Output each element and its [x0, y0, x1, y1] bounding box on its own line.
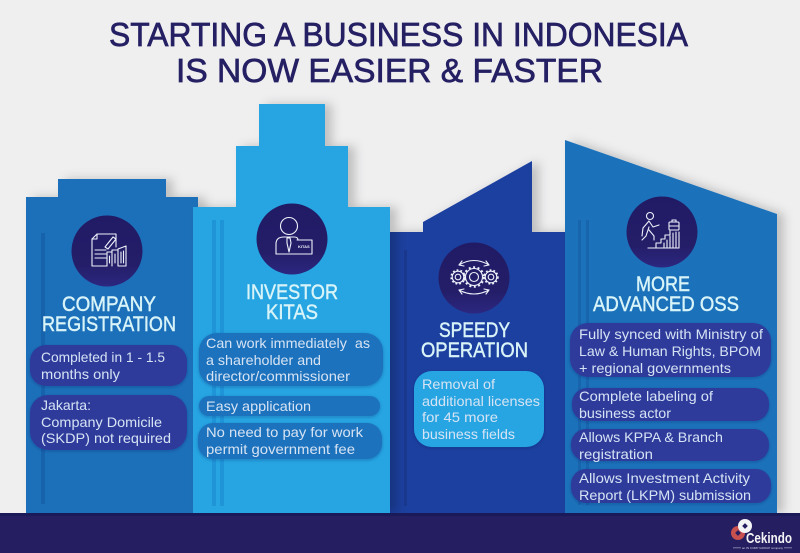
callout: LKPM submission: Report (LKPM) submission: [579, 487, 751, 503]
logo: Cekindo: [731, 519, 792, 550]
title: [109, 17, 689, 90]
callout: removal of licenses: business fields: [422, 426, 515, 442]
callout: removal of licenses: Removal of: [422, 376, 495, 392]
callout: no work permit fee: permit government fee: [206, 441, 355, 457]
callout: can work immediately: Can work immediately as: [206, 335, 370, 351]
icon: person climbing stairs: [626, 196, 698, 268]
icon: investor with KITAS card: [256, 204, 328, 274]
callout: can work immediately: director/commissioner: [206, 368, 350, 384]
panel: investor kitas building: [193, 104, 390, 513]
heading: speedy operation: OPERATION: [421, 339, 528, 362]
callout: no work permit fee: No need to pay for work: [206, 424, 364, 440]
icon: gears: [438, 242, 510, 314]
callout: Jakarta domicile: Jakarta:: [41, 397, 91, 413]
callout: KPPA and branch: [571, 429, 769, 462]
logo: Cekindo: an IN CORP GROUP company: [742, 546, 783, 550]
heading: speedy operation: SPEEDY: [439, 319, 510, 342]
callout: can work immediately: [199, 333, 383, 386]
callout: easy application: Easy application: [206, 398, 311, 414]
callout: completed in 1 to 1.5 months: Completed in 1 - 1.5: [41, 349, 165, 365]
footer band: [0, 513, 800, 553]
callout: fully synced: Fully synced with Ministry of: [579, 326, 763, 342]
callout: Jakarta domicile: [30, 395, 187, 450]
callout: KPPA and branch: Allows KPPA & Branch: [579, 429, 723, 445]
callout: complete labeling: business actor: [579, 405, 671, 421]
callout: Jakarta domicile: Company Domicile: [41, 414, 162, 430]
panel: speedy operation building: [390, 161, 565, 513]
callout: removal of licenses: [414, 371, 544, 447]
panel: more advanced OSS building: [565, 140, 777, 513]
heading: company registration: [42, 293, 176, 336]
callout: KPPA and branch: registration: [579, 446, 653, 462]
callout: removal of licenses: for 45 more: [422, 409, 498, 425]
title: IS NOW EASIER & FASTER: [176, 53, 603, 90]
callout: complete labeling: [572, 388, 769, 421]
heading: investor kitas: KITAS: [266, 301, 318, 324]
heading: company registration: COMPANY: [62, 293, 156, 316]
callout: removal of licenses: additional licenses: [422, 393, 540, 409]
title: STARTING A BUSINESS IN INDONESIA: [109, 17, 689, 54]
callout: completed in 1 to 1.5 months: months only: [41, 366, 120, 382]
heading: investor kitas: INVESTOR: [246, 281, 338, 304]
heading: company registration: REGISTRATION: [42, 313, 176, 336]
callout: fully synced: + regional governments: [579, 360, 731, 376]
callout: Jakarta domicile: (SKDP) not required: [41, 430, 171, 446]
heading: investor kitas: [246, 281, 338, 324]
callout: fully synced: Law & Human Rights, BPOM: [579, 343, 761, 359]
callout: fully synced: [570, 323, 771, 377]
callout: completed in 1 to 1.5 months: [30, 345, 187, 386]
icon: investor with KITAS card: KITAS: [298, 244, 310, 249]
callout: can work immediately: a shareholder and: [206, 352, 321, 368]
heading: more advanced OSS: ADVANCED OSS: [593, 293, 739, 316]
icon: document and buildings: [72, 216, 142, 286]
heading: more advanced OSS: MORE: [636, 273, 690, 296]
callout: LKPM submission: Allows Investment Activity: [579, 470, 750, 486]
heading: speedy operation: [421, 319, 528, 362]
callout: no work permit fee: [198, 423, 382, 459]
callout: complete labeling: Complete labeling of: [579, 388, 713, 404]
heading: more advanced OSS: [593, 273, 739, 316]
panel: company registration building: [26, 179, 198, 513]
callout: LKPM submission: [571, 469, 771, 503]
callout: easy application: [199, 396, 380, 416]
